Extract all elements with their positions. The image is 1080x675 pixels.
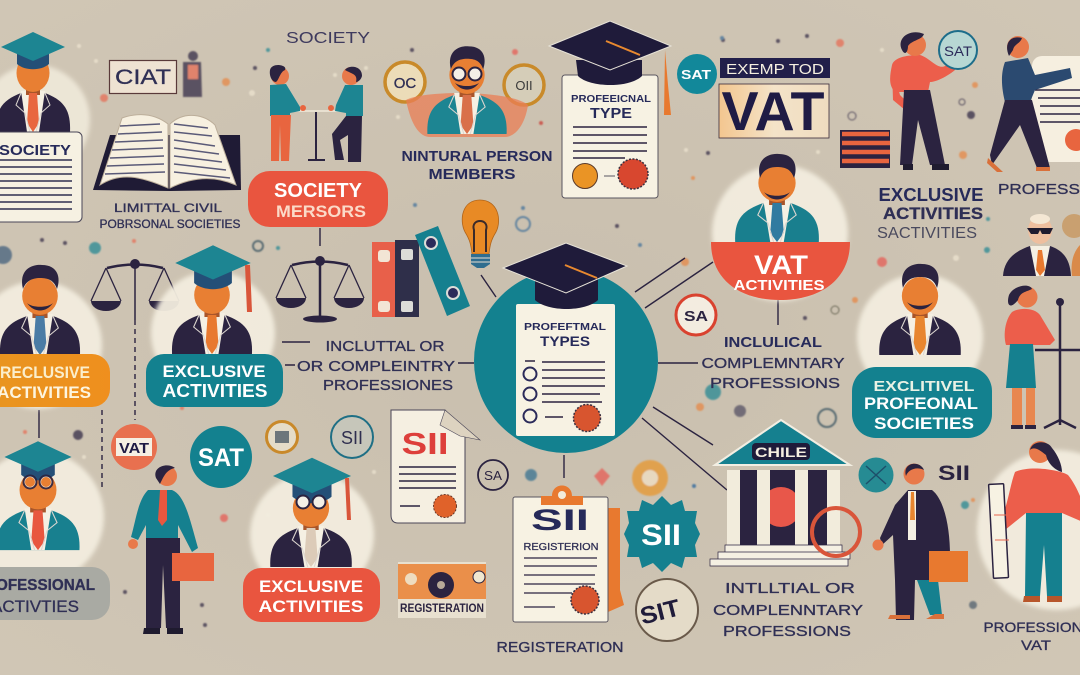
panel: registration ticket	[398, 562, 486, 618]
callout: red pill: EXCLUSIVE	[259, 577, 363, 596]
heading: society: SOCIETY	[0, 142, 71, 159]
icon: scales of justice left	[91, 259, 179, 320]
text: initial or complementary professions bottom	[713, 580, 863, 640]
panel: SII registration clipboard	[513, 486, 624, 622]
text: natural person members: NINTURAL PERSON	[402, 148, 552, 165]
text: complementary professions center: INCLULICAL	[724, 334, 822, 351]
icon: binders	[372, 226, 470, 317]
icon: SIT coin: SIT	[637, 594, 683, 630]
text: natural person members: MEMBERS	[428, 166, 516, 183]
icon: SII outline circle	[331, 416, 373, 458]
panel: central professional types	[474, 243, 658, 453]
person: woman with scroll	[977, 441, 1080, 610]
text: initial or complementary professions bottom: PROFESSIONS	[723, 623, 851, 640]
text: SII right: SII	[938, 462, 970, 485]
icon: open book	[93, 115, 241, 191]
person: woman holding SAT badge	[890, 31, 977, 170]
person: natural person with glasses	[385, 46, 544, 137]
icon: SA red badge: SA	[684, 308, 708, 325]
text: limited civil societies	[100, 201, 240, 231]
icon: X circle	[858, 458, 894, 492]
icon: scales of justice right	[276, 256, 364, 322]
panel: society paper	[0, 132, 82, 222]
panel: central professional types: TYPES	[540, 333, 590, 349]
icon: SA red badge	[676, 295, 716, 335]
text: complementary professions center: COMPLEMNTARY	[702, 355, 844, 372]
panel: SII registration clipboard: SII	[531, 504, 589, 537]
text: profession vat: VAT	[1021, 637, 1052, 653]
EXEMPT VAT sign and SAT badge	[677, 54, 830, 142]
person: graduate with teal cap	[0, 32, 90, 175]
two people shaking hands	[270, 65, 363, 162]
text: complementary professions center: PROFESSIONS	[710, 375, 840, 392]
connector lines	[39, 228, 778, 490]
person: businessman with document	[987, 36, 1080, 172]
callout: teal pill: EXCLUSIVE	[162, 362, 266, 381]
callout: VAT activities badge: ACTIVITIES	[734, 277, 824, 294]
person: professional activities	[0, 441, 110, 620]
CIAT label box	[110, 60, 176, 94]
panel: registration ticket: REGISTERATION	[400, 601, 484, 615]
icon: gold coin	[266, 422, 298, 452]
text: profession vat	[984, 619, 1080, 653]
callout: orange pill	[0, 354, 110, 407]
person: exclusive professional societies	[852, 264, 992, 438]
icon: stacked books	[840, 130, 890, 168]
callout: society members pill	[248, 171, 388, 227]
EXEMPT VAT sign and SAT badge: EXEMP TOD	[726, 61, 824, 78]
CIAT label box: CIAT	[115, 66, 171, 89]
callout: VAT activities badge	[711, 242, 850, 300]
icon: SIT coin	[636, 579, 698, 641]
text: limited civil societies: POBRSONAL SOCIETIES	[100, 217, 240, 231]
panel: professional type document: PROFEEICNAL	[571, 94, 651, 105]
callout: red pill: ACTIVITIES	[258, 597, 364, 616]
icon: SAT teal circle: SAT	[198, 444, 244, 472]
callout: society members pill: SOCIETY	[274, 180, 363, 202]
text: initial or complementary professions left: PROFESSIONES	[323, 377, 453, 394]
text: initial or complementary professions left: INCLUTTAL OR	[326, 338, 445, 355]
text: initial or complementary professions left	[297, 338, 455, 394]
text: exclusive activities: ACTIVITIES	[883, 204, 983, 223]
person: exclusive activities orange	[0, 265, 110, 409]
panel: SII notice document	[391, 410, 480, 523]
icon: SA outline badge: SA	[484, 468, 502, 483]
person: bald man with glasses	[1003, 214, 1080, 276]
person: standing man with briefcase	[128, 465, 214, 634]
icon: SII starburst: SII	[641, 519, 681, 552]
callout: teal societies pill: EXCLITIVEL	[874, 378, 974, 395]
panel: professional type document: TYPE	[590, 105, 632, 122]
icon: lightbulb	[462, 200, 499, 268]
callout: teal pill: ACTIVITIES	[162, 381, 268, 401]
panel: bank building Chile: CHILE	[755, 444, 807, 460]
callout: teal societies pill	[852, 367, 992, 438]
person: natural person with glasses: OII	[515, 78, 533, 93]
text: exclusive activities: EXCLUSIVE	[878, 185, 984, 205]
callout: teal societies pill: SOCIETIES	[874, 414, 974, 433]
panel: central professional types: PROFEFTMAL	[524, 321, 607, 333]
text: profession vat: PROFESSION	[984, 619, 1080, 635]
icon: SII outline circle: SII	[341, 428, 363, 448]
text: natural person members	[402, 148, 552, 183]
icon: VAT orange circle: VAT	[119, 440, 149, 457]
text: initial or complementary professions bottom: COMPLENNTARY	[713, 602, 863, 619]
text: initial or complementary professions left: OR COMPLEINTRY	[297, 358, 455, 375]
panel: bank building Chile	[710, 420, 860, 566]
icon: SII starburst	[624, 496, 700, 572]
callout: orange pill: RECLUSIVE	[0, 363, 90, 382]
callout: grey pill	[0, 567, 110, 620]
icon: SAT teal circle	[190, 426, 252, 488]
callout: teal societies pill: PROFEONAL	[864, 394, 978, 413]
text: initial or complementary professions bottom: INTLLTIAL OR	[725, 580, 855, 597]
EXEMPT VAT sign and SAT badge: VAT	[722, 80, 824, 142]
person: suited man with briefcase	[872, 464, 968, 620]
panel: SII registration clipboard: REGISTERION	[524, 541, 598, 553]
person: exclusive activities red	[243, 458, 380, 622]
callout: VAT activities badge: VAT	[754, 250, 809, 280]
text: complementary professions center	[702, 334, 844, 392]
person: woman holding SAT badge: SAT	[944, 43, 972, 59]
text: exclusive activities	[877, 185, 984, 242]
person: natural person with glasses: OC	[394, 75, 416, 92]
panel: professional type document	[549, 21, 671, 198]
callout: teal pill	[146, 354, 283, 407]
callout: red pill	[243, 568, 380, 622]
icon: VAT orange circle	[111, 424, 157, 470]
person: exclusive activities teal	[146, 245, 283, 407]
icon: SA outline badge	[478, 460, 508, 490]
person: VAT activities	[711, 154, 850, 301]
person: woman with scale stand	[1005, 286, 1080, 429]
text: limited civil societies: LIMITTAL CIVIL	[114, 201, 222, 215]
text: registration: REGISTERATION	[496, 639, 624, 656]
callout: society members pill: MERSORS	[276, 202, 366, 221]
text: society top: SOCIETY	[286, 30, 370, 47]
EXEMPT VAT sign and SAT badge: SAT	[681, 67, 711, 82]
text: exclusive activities: SACTIVITIES	[877, 225, 977, 242]
panel: SII notice document: SII	[402, 426, 448, 461]
